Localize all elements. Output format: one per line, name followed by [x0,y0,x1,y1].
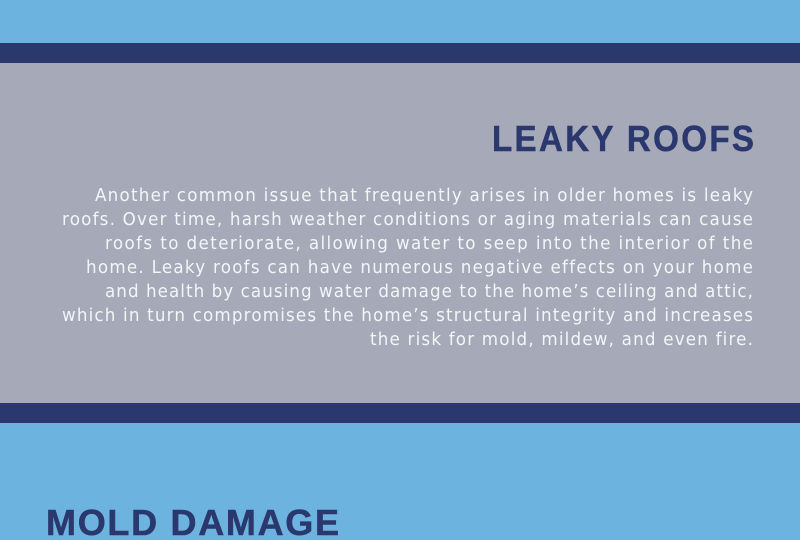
body text [62,185,753,350]
body text: and health by causing water damage to the home’s ceiling and attic, [105,281,753,302]
heading: leaky roofs: LEAKY ROOFS [492,120,754,159]
panel: leaky roofs [0,43,800,423]
top navy band [0,43,800,63]
body text: Another common issue that frequently arises in older homes is leaky [95,185,753,206]
body text: home. Leaky roofs can have numerous negative effects on your home [86,257,753,278]
body text: which in turn compromises the home’s structural integrity and increases [62,305,753,326]
bottom navy band [0,403,800,423]
body text: roofs to deteriorate, allowing water to seep into the interior of the [105,233,753,254]
body text: roofs. Over time, harsh weather conditions or aging materials can cause [62,209,753,230]
body text: the risk for mold, mildew, and even fire. [370,329,753,350]
